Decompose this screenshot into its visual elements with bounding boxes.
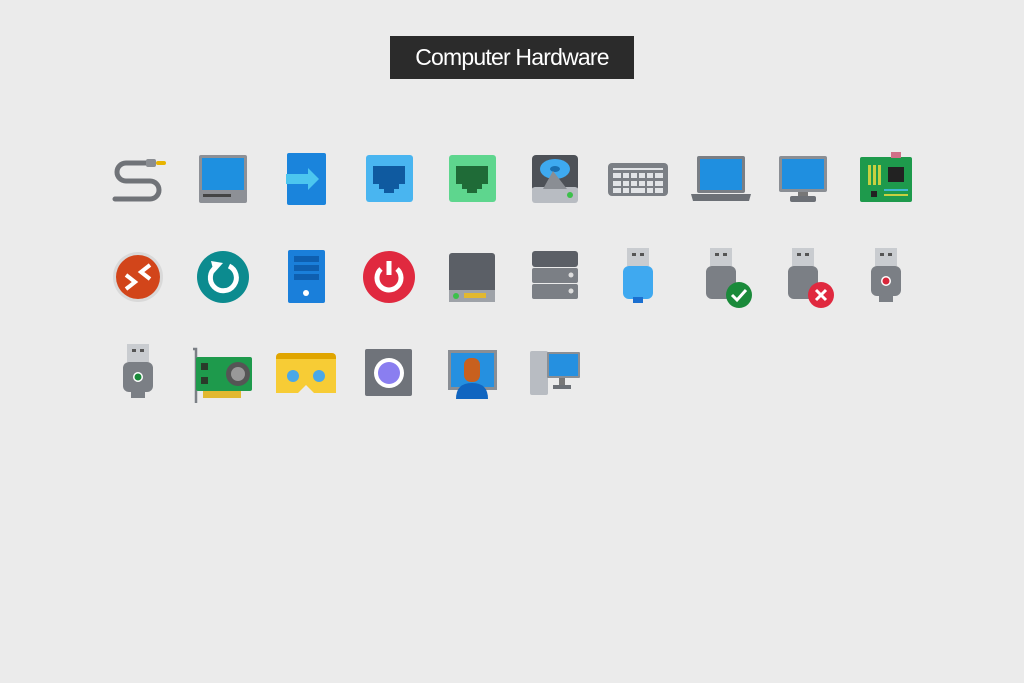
icon: usb blue — [623, 248, 653, 303]
icon: laptop — [691, 156, 751, 201]
icon: ethernet blue — [366, 155, 413, 202]
icon: camera lens — [365, 349, 412, 396]
icon: motherboard — [860, 152, 912, 202]
icon: power — [363, 251, 415, 303]
icon: ssd — [449, 253, 495, 302]
icon: refresh — [197, 251, 249, 303]
icon: remote desktop — [113, 252, 163, 302]
title: Computer Hardware — [415, 44, 609, 70]
icon: audio cable — [115, 159, 166, 199]
icon: usb record — [871, 248, 901, 302]
icon: usb error — [788, 248, 834, 308]
icon: computer — [199, 155, 247, 203]
icon: user monitor — [448, 350, 497, 399]
icon: monitor — [779, 156, 827, 202]
icon: ethernet green — [449, 155, 496, 202]
icon: server stack — [532, 251, 578, 299]
icon: graphics card — [193, 349, 252, 403]
icon: desktop pc — [530, 351, 580, 395]
icon: keyboard — [608, 163, 668, 196]
icon: usb check — [706, 248, 752, 308]
icon: usb green — [123, 344, 153, 398]
icon: sign in — [286, 153, 326, 205]
icon: server tower — [288, 250, 325, 303]
title — [390, 36, 634, 79]
icon: vr headset — [276, 353, 336, 393]
icon: hard drive — [532, 155, 578, 203]
